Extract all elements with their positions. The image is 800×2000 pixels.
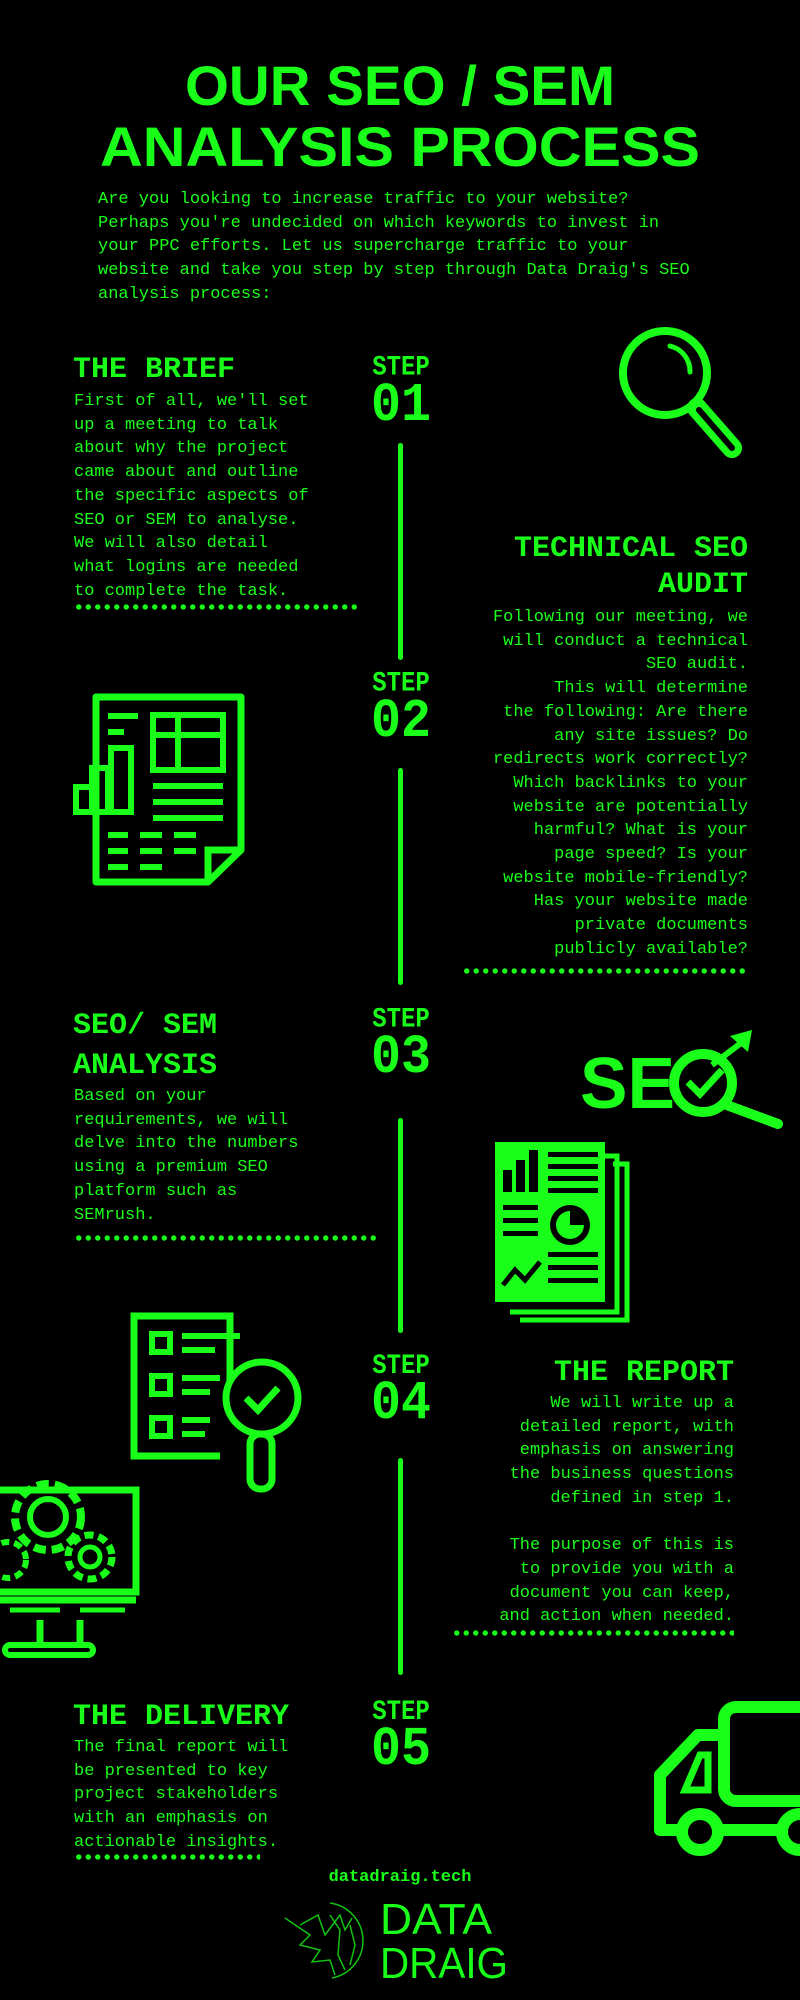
- step 02: STEP: [372, 669, 430, 700]
- logo: [284, 1895, 508, 1985]
- step 02: 02: [371, 691, 431, 754]
- icon: dragon: [285, 1903, 363, 1978]
- icon: checklist magnifier: [130, 1312, 302, 1492]
- icon: analytics document: [495, 1142, 630, 1322]
- icon: seo magnifier: SE: [580, 1044, 675, 1124]
- heading: seo/sem analysis: SEO/ SEM ANALYSIS: [73, 1009, 217, 1083]
- step 04: STEP: [372, 1351, 430, 1382]
- title: [100, 54, 700, 178]
- icon: report document: [73, 694, 244, 886]
- step 01: STEP: [372, 353, 430, 384]
- heading: technical seo audit: TECHNICAL SEO AUDIT: [514, 532, 748, 602]
- heading: the brief: THE BRIEF: [73, 353, 235, 387]
- intro text: Are you looking to increase traffic to your website? Perhaps you're undecided on which keywords to invest in your PPC efforts. Let us supercharge traffic to your website and take you step by step through Data Draig's SEO analysis process:: [98, 190, 690, 304]
- heading: the delivery: THE DELIVERY: [73, 1700, 289, 1734]
- logo text: DATA: [380, 1895, 493, 1944]
- title: OUR SEO / SEM: [185, 54, 615, 117]
- text: the brief: First of all, we'll set up a meeting to talk about why the project came about and outline the specific aspects of SEO or SEM to analyse. We will also detail what logins are needed to complete the task.: [74, 392, 309, 601]
- text: the delivery: The final report will be presented to key project stakeholders with an emphasis on actionable insights.: [74, 1738, 288, 1852]
- step 03: STEP: [372, 1005, 430, 1036]
- text: the report: We will write up a detailed report, with emphasis on answering the business questions defined in step 1. The purpose of this is to provide you with a document you can keep, and action when needed.: [499, 1394, 734, 1626]
- icon: computer gears: [0, 1480, 140, 1658]
- icon: magnifier: [619, 327, 742, 458]
- step 03: 03: [371, 1027, 431, 1090]
- footer url: datadraig.tech: [329, 1868, 471, 1887]
- step 05: STEP: [372, 1697, 430, 1728]
- step 05: 05: [371, 1719, 431, 1782]
- icon: truck: [654, 1701, 800, 1856]
- step 01: 01: [371, 375, 431, 438]
- step 04: 04: [371, 1373, 431, 1436]
- heading: the report: THE REPORT: [554, 1356, 734, 1390]
- text: technical seo audit: Following our meeting, we will conduct a technical SEO audit. This will determine the following: Are there any site issues? Do redirects work correctly? Which backlinks to your website are potentially harmful? What is your page speed? Is your website mobile-friendly? Has your website made private documents publicly available?: [493, 608, 748, 959]
- title: ANALYSIS PROCESS: [100, 115, 700, 178]
- icon: seo magnifier: [580, 1030, 783, 1129]
- text: seo/sem analysis: Based on your requirements, we will delve into the numbers using a premium SEO platform such as SEMrush.: [74, 1087, 298, 1225]
